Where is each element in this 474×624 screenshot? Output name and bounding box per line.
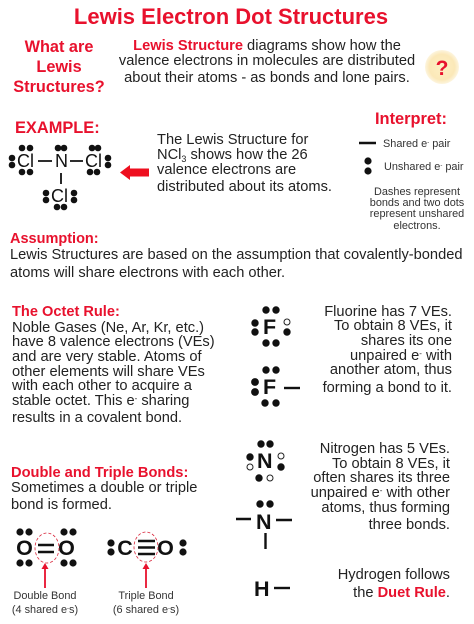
diagram: NCl3 Lewis structure: Cl [85,151,102,171]
diagram: double bond O2: O [58,536,75,560]
text block: nitrogen: unpaired e [311,485,380,501]
title: Lewis Electron Dot Structures [74,4,388,29]
text block: nitrogen: with other [382,485,450,501]
text block: assumption [10,247,463,281]
icon: question mark [425,50,459,84]
icon: question mark: ? [436,57,448,80]
heading: what are Lewis structures: Structures? [13,78,105,96]
diagram: nitrogen with bonds [236,500,292,549]
text block: NCl3 description: 3 [181,154,186,164]
text block: octet rule: sharing [137,393,189,409]
text block: fluorine: - [419,349,422,358]
text block: hydrogen: Hydrogen follows [338,567,450,583]
text block: legend note: bonds and two dots [370,197,465,209]
label: double bond: s) [69,604,78,616]
text block: legend note: represent unshared [370,208,464,220]
text block: double and triple bonds: bond is formed. [11,497,112,513]
legend: shared pair: Shared e [383,138,427,150]
label: triple bond: - [168,606,170,612]
text block: octet rule: with each other to acquire a [11,378,193,394]
diagram: fluorine atom: F [263,315,276,339]
legend: shared pair: pair [429,138,451,150]
diagram: fluorine atom [251,306,291,347]
arrow: points to NCl3 [120,165,149,180]
text block: fluorine: another atom, thus [330,362,452,378]
text block: fluorine: forming a bond to it. [323,380,452,396]
diagram: double bond O2 [16,528,77,588]
text block: definition: Lewis Structure diagrams show how the [133,38,401,54]
text block: fluorine: with [422,348,452,364]
diagram: nitrogen atom [246,440,285,482]
text block: nitrogen: atoms, thus forming [321,500,450,516]
text block: NCl3 description: NCl [157,147,181,163]
legend: unshared pair: Unshared e [384,161,440,173]
text block: NCl3 description: The Lewis Structure for [157,132,308,148]
text block: nitrogen: three bonds. [369,517,450,533]
legend: unshared pair: - [440,163,442,169]
text block: NCl3 description [157,132,332,195]
text block: assumption: Lewis Structures are based on the assumption that covalently-bonded [10,247,463,263]
text block: definition: valence electrons in molecules are distributed [119,53,415,69]
text block: octet rule: Noble Gases (Ne, Ar, Kr, etc.) [12,320,204,336]
text block: double and triple bonds [11,480,197,513]
text block: double and triple bonds: Sometimes a double or triple [11,480,197,496]
diagram: NCl3 Lewis structure: Cl [17,151,34,171]
text block: legend note: Dashes represent [374,186,460,198]
text block: hydrogen [338,567,450,601]
label: triple bond [113,590,179,616]
text block: nitrogen [311,441,450,533]
label: double bond: Double Bond [14,590,76,602]
heading: assumption: Assumption: [10,231,99,247]
text block: nitrogen: often shares its three [313,470,450,486]
heading: double and triple bonds: Double and Triple Bonds: [11,465,188,481]
label: double bond: - [67,606,69,612]
text block: octet rule [11,320,215,426]
text block: NCl3 description: distributed about its atoms. [157,179,332,195]
legend: unshared pair [364,157,464,175]
legend: shared pair [359,138,451,150]
diagram: hydrogen with bond [254,577,290,601]
diagram: triple bond CO: O [157,536,174,560]
label: double bond: (4 shared e [12,604,67,616]
text block: assumption: atoms will share electrons with each other. [10,265,285,281]
text block: octet rule: and are very stable. Atoms of [12,349,203,365]
text block: NCl3 description: shows how the 26 [186,147,308,163]
diagram: triple bond CO: C [117,536,133,560]
heading: what are Lewis structures: Lewis [36,58,82,76]
text block: fluorine: To obtain 8 VEs, it [334,318,452,334]
legend: unshared pair: pair [442,161,464,173]
heading: interpret: Interpret: [375,110,447,128]
diagram: fluorine with bond: F [263,375,276,399]
text block: nitrogen: To obtain 8 VEs, it [332,456,450,472]
text block: legend note [370,186,465,232]
label: double bond [12,590,78,616]
label: triple bond: (6 shared e [113,604,168,616]
text block: fluorine: Fluorine has 7 VEs. [324,304,452,320]
legend: shared pair: - [427,140,429,146]
text block: definition: about their atoms - as bonds and lone pairs. [124,70,410,86]
text block: fluorine: shares its one [361,333,452,349]
diagram: nitrogen with bonds: N [256,510,272,534]
text block: octet rule: other elements will share VEs [12,364,205,380]
text block: octet rule: - [135,394,138,403]
diagram: triple bond CO [107,532,187,588]
label: triple bond: s) [170,604,179,616]
text block: NCl3 description: valence electrons are [157,162,296,178]
diagram: NCl3 Lewis structure: N [55,151,68,171]
diagram: nitrogen atom: N [257,449,273,473]
text block: legend note: electrons. [393,220,441,232]
text block: fluorine: unpaired e [350,348,419,364]
heading: what are Lewis structures [13,38,105,96]
diagram: NCl3 Lewis structure [9,145,111,210]
heading: example: EXAMPLE: [15,119,100,137]
text block: octet rule: have 8 valence electrons (VEs) [12,334,215,350]
heading: what are Lewis structures: What are [25,38,93,56]
text block: fluorine [323,304,452,396]
text block: octet rule: stable octet. This e [12,393,135,409]
text block: octet rule: results in a covalent bond. [12,410,182,426]
text block: nitrogen: Nitrogen has 5 VEs. [320,441,450,457]
text block: definition [119,38,415,86]
diagram: hydrogen with bond: H [254,577,270,601]
heading: octet rule: The Octet Rule: [12,304,120,320]
diagram: fluorine with bond [251,366,300,407]
diagram: NCl3 Lewis structure: Cl [51,186,68,206]
text block: nitrogen: - [380,486,383,495]
text block: hydrogen: the Duet Rule. [353,585,450,601]
label: triple bond: Triple Bond [118,590,174,602]
diagram: double bond O2: O [16,536,33,560]
